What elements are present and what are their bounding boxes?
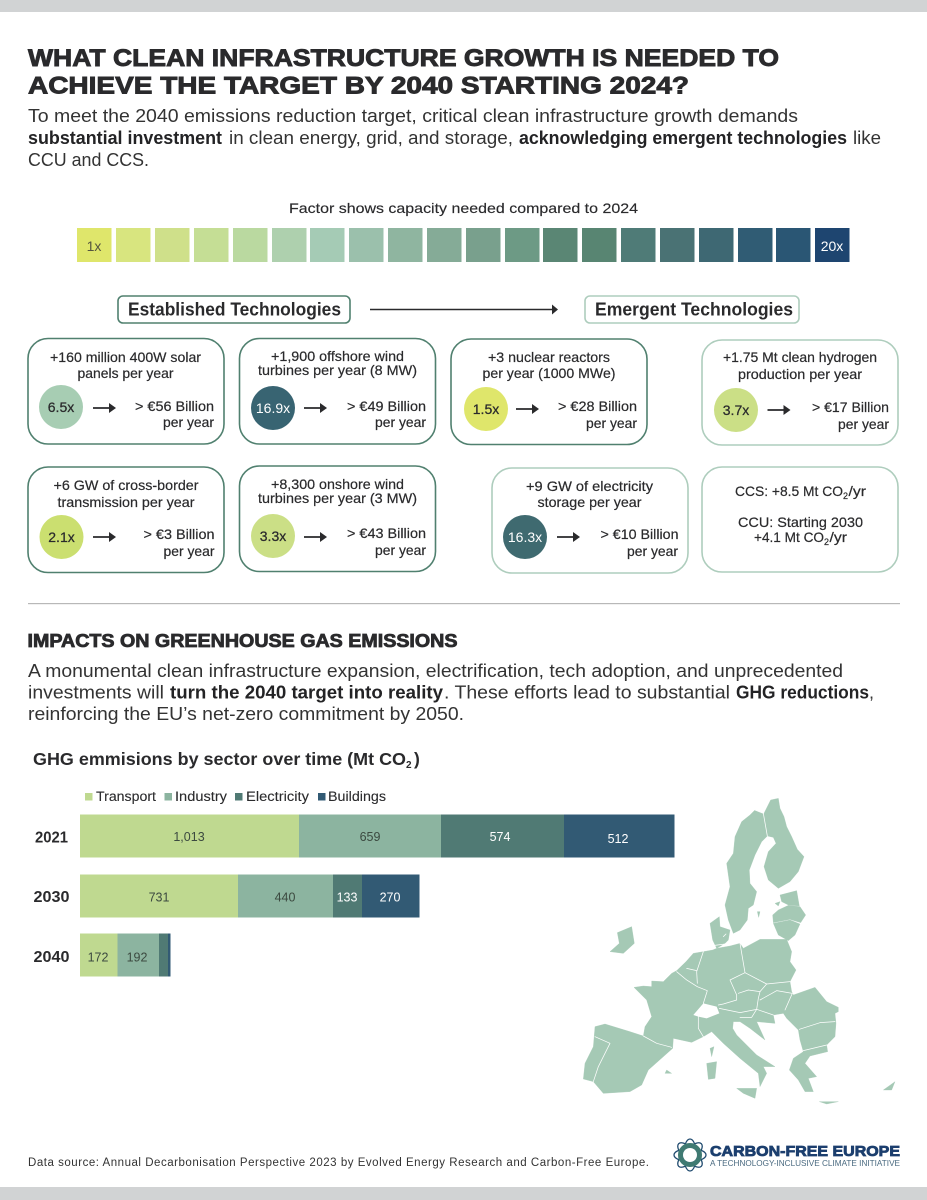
- card: solar panels: > €56 Billion: [135, 398, 214, 414]
- card: onshore wind: turbines per year (3 MW): [258, 490, 417, 506]
- impacts text: ,: [869, 682, 874, 702]
- intro text: substantial investment: [28, 128, 222, 148]
- card: solar panels: per year: [163, 414, 214, 430]
- impacts text: turn the 2040 target into reality: [170, 682, 443, 702]
- chart legend: Electricity: [246, 789, 309, 804]
- card: electricity storage: per year: [627, 543, 678, 559]
- bar: 2021: 512: [608, 832, 628, 846]
- bar: 2021: 2021: [35, 830, 68, 846]
- bar: 2021: [35, 814, 674, 858]
- intro text: acknowledging emergent technologies: [519, 128, 847, 148]
- heading: established technologies: Established Technologies: [128, 300, 341, 320]
- impacts text: . These efforts lead to substantial: [444, 682, 730, 702]
- card: clean hydrogen: +1.75 Mt clean hydrogen: [723, 349, 877, 365]
- card: CCS and CCU: /yr: [848, 483, 866, 499]
- colour scale 1x to 20x: [77, 228, 850, 262]
- card: clean hydrogen: > €17 Billion: [812, 399, 889, 415]
- title: WHAT CLEAN INFRASTRUCTURE GROWTH IS NEEDED TO: [28, 45, 779, 72]
- intro text: To meet the 2040 emissions reduction target, critical clean infrastructure growth demands: [28, 106, 798, 126]
- logo: Carbon-Free Europe: CARBON-FREE EUROPE: [710, 1143, 900, 1160]
- card: CCS and CCU: CCU: Starting 2030: [738, 514, 863, 530]
- card: electricity storage: storage per year: [538, 494, 642, 510]
- card: clean hydrogen: per year: [838, 416, 889, 432]
- impacts text: reinforcing the EU’s net-zero commitment by 2050.: [28, 704, 464, 724]
- impacts text: A monumental clean infrastructure expansion, electrification, tech adoption, and unprecedented: [28, 661, 843, 681]
- card: solar panels: +160 million 400W solar: [50, 349, 201, 365]
- card: solar panels: panels per year: [78, 365, 174, 381]
- logo: Carbon-Free Europe: A TECHNOLOGY-INCLUSIVE CLIMATE INITIATIVE: [710, 1158, 900, 1168]
- chart title: 2: [406, 760, 412, 771]
- chart title: ): [414, 749, 420, 769]
- heading: impacts on greenhouse gas emissions: IMPACTS ON GREENHOUSE GAS EMISSIONS: [28, 631, 458, 651]
- bar: 2030: 270: [380, 890, 400, 904]
- chart legend: Buildings: [328, 789, 386, 804]
- title: ACHIEVE THE TARGET BY 2040 STARTING 2024?: [28, 72, 689, 100]
- title: [28, 45, 779, 100]
- intro text: [28, 106, 881, 170]
- bar: 2030: [34, 874, 420, 918]
- bar: 2040: [34, 934, 170, 976]
- card: nuclear reactors: per year: [586, 415, 637, 431]
- chart legend: Industry: [175, 789, 227, 804]
- bar: 2021: 1,013: [173, 830, 205, 844]
- card: onshore wind: +8,300 onshore wind: [271, 476, 404, 492]
- scale caption: Factor shows capacity needed compared to 2024: [289, 200, 638, 216]
- card: CCS and CCU: CCS: +8.5 Mt CO: [735, 483, 843, 499]
- chart legend: Transport: [96, 789, 156, 804]
- bar: 2030: 440: [275, 890, 295, 904]
- card: CCS and CCU: [702, 467, 898, 572]
- card: clean hydrogen: 3.7x: [723, 402, 749, 418]
- card: CCS and CCU: +4.1 Mt CO: [754, 529, 824, 545]
- chart legend: [85, 789, 386, 804]
- impacts text: [28, 661, 874, 724]
- bar: 2021: 574: [490, 830, 510, 844]
- card: onshore wind: per year: [375, 542, 426, 558]
- intro text: like: [853, 128, 881, 148]
- card: onshore wind: 3.3x: [260, 528, 286, 544]
- colour scale 1x to 20x: 1x: [87, 238, 101, 254]
- card: nuclear reactors: 1.5x: [473, 401, 499, 417]
- card: nuclear reactors: +3 nuclear reactors: [488, 349, 610, 365]
- card: offshore wind: per year: [375, 414, 426, 430]
- bar: 2040: 2040: [34, 949, 70, 966]
- card: cross-border transmission: +6 GW of cross-border: [54, 477, 199, 493]
- card: cross-border transmission: 2.1x: [48, 529, 75, 545]
- colour scale 1x to 20x: 20x: [821, 238, 843, 254]
- card: nuclear reactors: [451, 339, 647, 444]
- card: cross-border transmission: [28, 467, 224, 572]
- card: offshore wind: +1,900 offshore wind: [271, 348, 404, 364]
- card: clean hydrogen: [702, 340, 898, 445]
- card: nuclear reactors: > €28 Billion: [558, 398, 637, 414]
- card: CCS and CCU: /yr: [830, 529, 847, 545]
- data source: Data source: Annual Decarbonisation Perspective 2023 by Evolved Energy Research and Carbon-Free Europe.: [28, 1157, 649, 1169]
- top grey band: [0, 0, 927, 12]
- card: nuclear reactors: per year (1000 MWe): [482, 365, 616, 381]
- divider: [28, 603, 900, 604]
- arrow: established to emergent: [370, 304, 558, 314]
- map of the EU: [583, 798, 895, 1104]
- logo: Carbon-Free Europe: [674, 1139, 900, 1171]
- card: solar panels: 6.5x: [48, 399, 74, 415]
- card: electricity storage: [492, 468, 688, 573]
- card: solar panels: [28, 338, 224, 444]
- card: electricity storage: > €10 Billion: [600, 526, 678, 542]
- intro text: CCU and CCS.: [28, 150, 149, 170]
- card: CCS and CCU: 2: [824, 537, 829, 547]
- bottom grey band: [0, 1187, 927, 1200]
- card: cross-border transmission: per year: [164, 543, 215, 559]
- card: cross-border transmission: > €3 Billion: [144, 526, 214, 542]
- bar: 2030: 731: [149, 890, 169, 904]
- card: offshore wind: 16.9x: [256, 400, 290, 416]
- chart title: GHG emmisions by sector over time (Mt CO: [33, 749, 406, 769]
- card: clean hydrogen: production per year: [738, 366, 862, 382]
- bar: 2021: 659: [360, 830, 380, 844]
- card: offshore wind: [240, 338, 436, 444]
- impacts text: investments will: [28, 682, 164, 702]
- bar: 2030: 133: [337, 890, 357, 904]
- card: electricity storage: +9 GW of electricity: [526, 478, 653, 494]
- card: electricity storage: 16.3x: [508, 529, 542, 545]
- card: offshore wind: > €49 Billion: [347, 398, 426, 414]
- bar: 2040: 172: [88, 950, 108, 964]
- card: offshore wind: turbines per year (8 MW): [258, 362, 417, 378]
- card: cross-border transmission: transmission per year: [58, 494, 195, 510]
- bar: 2030: 2030: [34, 889, 70, 906]
- heading: emergent technologies: Emergent Technologies: [595, 300, 793, 320]
- bar: 2040: 192: [127, 950, 147, 964]
- card: onshore wind: > €43 Billion: [347, 525, 426, 541]
- impacts text: GHG reductions: [736, 682, 869, 702]
- card: onshore wind: [240, 466, 436, 572]
- card: CCS and CCU: 2: [843, 491, 848, 501]
- intro text: in clean energy, grid, and storage,: [229, 128, 513, 148]
